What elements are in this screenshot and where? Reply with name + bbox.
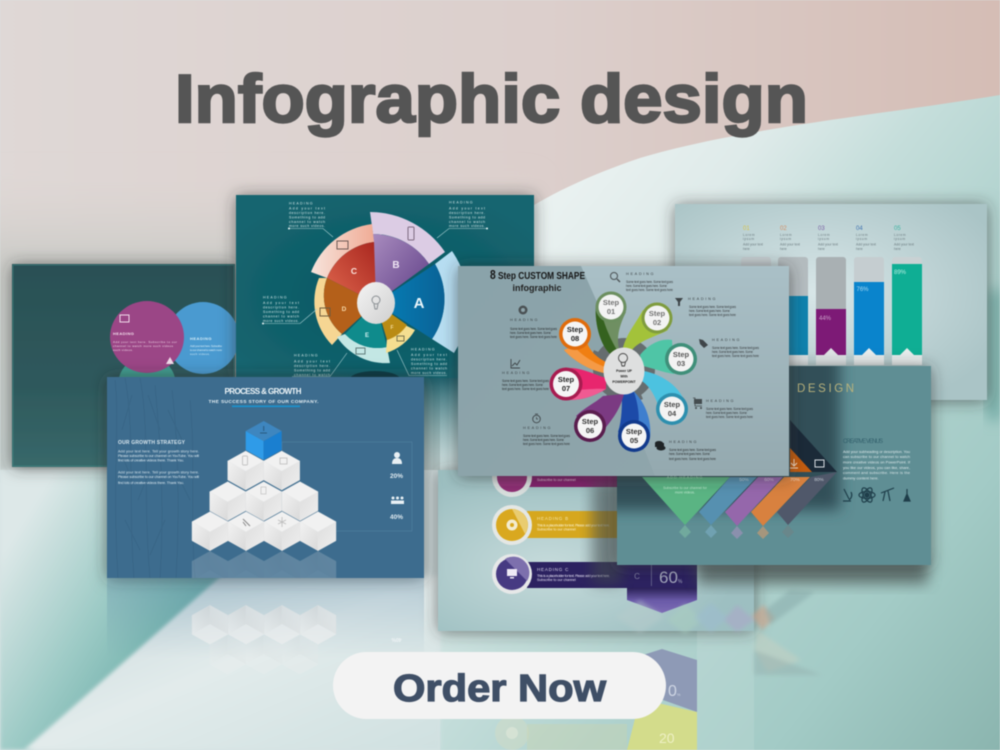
step 07	[550, 368, 606, 400]
text block: creative venus: can subscribe to our channel to watch	[843, 455, 910, 459]
button: order now: Order Now	[393, 668, 606, 710]
bar 03: here	[818, 247, 825, 251]
callout: top right: Add your text	[449, 206, 485, 210]
callout: top left: more such videos.	[289, 224, 325, 228]
text block: growth strategy	[118, 440, 199, 485]
wheel: segment D: D	[342, 306, 347, 313]
label: cart heading: Some text goes here. Some text goes	[706, 407, 753, 411]
venn circle: teal	[118, 356, 176, 414]
text block: growth strategy: Add your text here. Tell your growth story here.	[118, 450, 199, 454]
label: clock heading	[523, 414, 570, 446]
bar 03: 03	[818, 226, 825, 232]
venn circle: magenta	[110, 301, 184, 373]
callout: top left: description here.	[289, 211, 325, 215]
callout: top right: HEADING	[449, 200, 474, 204]
text block: growth strategy: OUR GROWTH STRATEGY	[118, 440, 186, 446]
row A	[492, 457, 617, 497]
step 03: Step	[673, 350, 690, 359]
bar 01: here	[743, 247, 750, 251]
triangle chart: 50%	[739, 477, 750, 483]
callout: bottom left: Add your text	[294, 360, 330, 364]
bar 03	[816, 226, 846, 365]
label: funnel heading: HEADING	[688, 297, 717, 301]
callout: top right: description here.	[449, 211, 485, 215]
callout: top left: Something to add	[289, 216, 325, 220]
callout: bottom left: Something to add	[294, 368, 330, 372]
step 06: 06	[586, 426, 594, 435]
label: cart heading: HEADING	[706, 399, 735, 403]
panel: triangle design slide	[592, 350, 931, 584]
wheel: segment E	[337, 303, 390, 363]
text block: growth strategy: Please subscribe to our channel on YouTube. You will	[118, 475, 199, 479]
label: tag heading: HEADING	[712, 338, 741, 342]
step 01: Step	[603, 298, 620, 307]
label: search heading: Some text goes here. Some text goes	[626, 280, 673, 284]
step 08	[559, 318, 606, 373]
bar 02: 02	[780, 226, 787, 232]
bar 05: 89%	[894, 270, 907, 276]
reflection: growth slide: 40%	[391, 636, 402, 642]
callout: top left	[288, 202, 333, 237]
label: clock heading: text goes here. Some text goes here	[523, 442, 570, 446]
step 04	[640, 371, 688, 425]
stat: 40 percent: 40%	[390, 514, 403, 521]
label: clock heading: HEADING	[523, 426, 552, 430]
bar 01	[741, 226, 771, 365]
wheel: segment C	[311, 224, 376, 303]
label: coins heading: HEADING	[669, 440, 698, 444]
step 01	[596, 292, 626, 356]
label: funnel heading: text goes here. Some text goes here	[689, 313, 736, 317]
bar 05: here	[894, 247, 901, 251]
triangle chart: Subscribe to our channel for	[663, 486, 708, 490]
label: chart heading: HEADING	[502, 371, 531, 375]
text block: growth strategy: Please subscribe to our channel on YouTube. You will	[118, 454, 199, 458]
callout: left: Add your text	[263, 301, 299, 305]
callout: top right: Something to add	[449, 216, 485, 220]
hexagon column C 60%	[627, 565, 697, 613]
callout: top right: channel to watch	[449, 220, 485, 224]
bar 05: ipsum	[894, 237, 906, 241]
bar 04: 04	[856, 226, 863, 232]
step 02: 02	[653, 318, 661, 327]
callout: left: channel to watch	[263, 314, 299, 318]
step 06	[574, 394, 624, 442]
text block: creative venus: you like our videos, you can like, share,	[843, 466, 910, 470]
wheel: segment B: B	[392, 260, 400, 271]
row A: Subscribe to our channel	[537, 478, 576, 482]
central hub: power up with powerpoint: POWERPOINT	[612, 380, 637, 384]
bar 03: ipsum	[818, 237, 830, 241]
step 02: Step	[649, 309, 666, 318]
label: tag heading	[699, 338, 759, 358]
step 06: Step	[582, 417, 599, 426]
label: funnel heading	[675, 297, 736, 317]
panel: wheel slide	[236, 195, 534, 470]
text block: creative venus: more creative videos on PowerPoint. If	[843, 460, 911, 464]
panel: list slide	[438, 457, 754, 631]
triangle chart: 60%	[764, 477, 775, 483]
venn circle: magenta: channel to watch more such videos	[113, 344, 174, 348]
cube pyramid	[192, 421, 336, 551]
label: coins heading: text goes here. Some text goes here	[669, 457, 716, 461]
hexagon column C 60%: C	[634, 572, 640, 581]
central hub: power up with powerpoint: With	[620, 374, 628, 378]
venn circle: magenta: such videos.	[113, 348, 133, 352]
callout: bottom left: channel to watch	[294, 373, 330, 377]
bar 05: Add your text	[894, 242, 914, 246]
bar 04: Add your text	[856, 242, 876, 246]
label: cart heading: here. Some text goes here. Some	[706, 411, 747, 415]
panel: bar chart slide	[675, 204, 987, 400]
wheel: segment C: C	[351, 266, 357, 276]
gear behind hub	[589, 334, 659, 403]
reflections below list slide	[495, 590, 822, 750]
cube reflection in slide	[192, 551, 336, 578]
label: funnel heading: here. Some text goes here. Some	[689, 309, 730, 313]
venn circle: magenta: Add your text here. Subscribe to our	[113, 340, 177, 344]
callout: bottom right: description here.	[411, 358, 447, 362]
wheel: segment F: F	[390, 325, 394, 331]
text block: growth strategy: Add your text here. Tell your growth story here.	[118, 470, 199, 474]
bar 01: Add your text	[743, 242, 763, 246]
text block: creative venus: CREATIVE VENUS	[843, 439, 883, 445]
bar 02: Add your text	[780, 242, 800, 246]
bar 04: 76%	[856, 287, 869, 293]
stat: 20 percent	[390, 452, 403, 480]
triangle chart: more videos.	[675, 490, 695, 494]
bar 05	[892, 226, 922, 365]
step 05: 05	[630, 436, 638, 445]
label: chart heading: here. Some text goes here. Some	[502, 383, 543, 387]
callout: left: more such videos.	[263, 319, 299, 323]
triangle chart: 70%	[790, 477, 801, 483]
label: target heading: text goes here. Some text goes here	[510, 335, 557, 339]
callout: left: Something to add	[263, 310, 299, 314]
triangle chart: 80%	[814, 477, 825, 483]
row C: This is a placeholder for text. Please add your text here.	[537, 574, 610, 578]
bar 03: 44%	[819, 316, 832, 322]
venn circle: blue	[167, 302, 239, 374]
row B	[492, 505, 617, 545]
text block: creative venus: Add your subheading or description. You	[843, 450, 910, 454]
step 02	[622, 302, 672, 352]
label: tag heading: Some text goes here. Some text goes	[712, 346, 759, 350]
stat: 40 percent	[390, 496, 404, 521]
panel: 8 step custom shape slide	[458, 266, 789, 476]
bar 03: Lorem	[818, 233, 830, 237]
label: clock heading: here. Some text goes here. Some	[523, 438, 564, 442]
wheel: segment E: E	[365, 333, 369, 339]
bar 02	[778, 226, 808, 365]
bar 03: Add your text	[818, 242, 838, 246]
step 08: 08	[571, 334, 579, 343]
venn circle: magenta: HEADING	[113, 331, 134, 336]
button: order now	[333, 652, 666, 719]
venn circle: blue: to our channel to watch more	[190, 348, 222, 352]
text block: growth strategy: find lots of creative videos there. Thank You.	[118, 481, 184, 485]
callout: bottom right: Add your text	[411, 353, 447, 357]
label: search heading: text goes here. Some text goes here	[626, 288, 673, 292]
step 01: 01	[607, 307, 615, 316]
reflections below list slide: 0%	[668, 683, 681, 700]
label: coins heading: Some text goes here. Some text goes	[669, 448, 716, 452]
step 07: Step	[558, 375, 575, 384]
hexagon column C 60%: 60%	[659, 568, 683, 587]
label: tag heading: text goes here. Some text goes here	[712, 354, 759, 358]
bar 04: ipsum	[856, 237, 868, 241]
label: funnel heading: Some text goes here. Some text goes	[689, 305, 736, 309]
label: coins heading: here. Some text goes here. Some	[669, 452, 710, 456]
heading: 8 step custom shape	[490, 267, 585, 293]
label: target heading: HEADING	[510, 318, 539, 322]
venn circle: blue: such videos.	[190, 352, 210, 356]
bar 05: Lorem	[894, 233, 906, 237]
row C: Subscribe to our channel	[537, 578, 576, 582]
label: target heading	[510, 306, 557, 339]
heading: process and growth	[208, 387, 318, 407]
callout: top right	[437, 200, 488, 238]
step 07: 07	[562, 384, 570, 393]
row B: HEADING B	[537, 516, 569, 521]
label: search heading	[610, 272, 673, 292]
heading: 8 step custom shape: 8 Step CUSTOM SHAPE	[490, 267, 585, 282]
bar 01: ipsum	[743, 237, 755, 241]
callout: left	[262, 296, 317, 324]
label: clock heading: Some text goes here. Some text goes	[523, 434, 570, 438]
label: chart heading	[502, 359, 549, 391]
label: coins heading	[655, 440, 716, 461]
callout: bottom right: HEADING	[411, 348, 436, 352]
row C: HEADING C	[537, 567, 569, 572]
stat: 20 percent: 20%	[390, 473, 403, 480]
callout: top left: Add your text	[289, 206, 325, 210]
heading: 8 step custom shape: infographic	[512, 283, 562, 293]
wheel: segment B	[370, 212, 445, 303]
icon row: science	[843, 486, 910, 504]
wheel hub with bulb	[357, 282, 395, 324]
callout: bottom right: more such videos.	[411, 371, 447, 375]
label: cart heading	[693, 398, 753, 419]
bar 01: Lorem	[743, 233, 755, 237]
triangle chart	[642, 420, 837, 539]
cube: blue top	[246, 421, 282, 460]
bar 01: 01	[743, 226, 750, 232]
bar 04	[854, 226, 884, 365]
central hub: power up with powerpoint	[604, 348, 644, 394]
step 05: Step	[626, 427, 643, 436]
row B: This is a placeholder for text. Please add your text here.	[537, 524, 610, 528]
label: cart heading: text goes here. Some text goes here	[706, 415, 753, 419]
callout: bottom left: description here.	[294, 364, 330, 368]
callout: top left: channel to watch	[289, 220, 325, 224]
bar 05: 05	[894, 226, 901, 232]
step 04: 04	[668, 409, 677, 418]
callout: top left: HEADING	[289, 202, 314, 206]
heading: design: DESIGN	[797, 383, 857, 395]
bar 04: here	[856, 247, 863, 251]
venn circle: blue: Add your text here. Subscribe	[190, 344, 222, 348]
panel: dark venn slide	[12, 264, 239, 467]
label: search heading: HEADING	[626, 272, 655, 276]
text block: creative venus: comment and subscribe. Here is the	[843, 471, 910, 475]
text block: creative venus	[843, 439, 911, 480]
reflections below list slide: 20	[659, 730, 675, 746]
row C	[492, 554, 697, 594]
label: chart heading: Some text goes here. Some text goes	[502, 379, 549, 383]
callout: top right: more such videos.	[449, 224, 485, 228]
callout: left: description here.	[263, 306, 299, 310]
text block: creative venus: dummy content here.	[843, 476, 879, 480]
step 03: 03	[677, 359, 685, 368]
label: target heading: here. Some text goes here. Some	[510, 331, 551, 335]
callout: bottom left: HEADING	[294, 354, 319, 358]
wheel: segment D	[314, 278, 376, 345]
venn circle: blue: HEADING	[190, 336, 212, 341]
step 08: Step	[567, 325, 584, 334]
callout: bottom left	[292, 353, 347, 377]
row B: Subscribe to our channel	[537, 528, 576, 532]
callout: bottom right: Something to add	[411, 362, 447, 366]
text block: growth strategy: find lots of creative videos there. Thank You.	[118, 458, 184, 462]
central hub: power up with powerpoint: Power UP	[616, 369, 633, 373]
heading: process and growth: PROCESS & GROWTH	[224, 387, 302, 396]
triangle chart: ADD HEADING	[667, 474, 703, 480]
callout: bottom right: channel to watch	[411, 366, 447, 370]
callout: left: HEADING	[263, 296, 288, 300]
title: Infographic design	[175, 61, 808, 137]
label: target heading: Some text goes here. Some text goes	[510, 327, 557, 331]
label: tag heading: here. Some text goes here. Some	[712, 350, 753, 354]
callout: bottom right	[397, 348, 447, 376]
reflection: growth slide	[107, 578, 424, 674]
label: chart heading: text goes here. Some text goes here	[502, 387, 549, 391]
step 03	[640, 340, 697, 375]
bar 02: here	[780, 247, 787, 251]
wheel: segment F	[376, 303, 415, 353]
step 04: Step	[664, 400, 681, 409]
wheel: segment A	[376, 251, 468, 353]
bar 02: Lorem	[780, 233, 792, 237]
panel: process and growth slide	[107, 377, 424, 590]
wheel: segment A: A	[414, 295, 425, 312]
heading: process and growth: THE SUCCESS STORY OF OUR COMPANY.	[208, 399, 318, 405]
bar 04: Lorem	[856, 233, 868, 237]
bar 02: ipsum	[780, 237, 792, 241]
step 05	[618, 388, 650, 452]
label: search heading: here. Some text goes here. Some	[626, 284, 667, 288]
